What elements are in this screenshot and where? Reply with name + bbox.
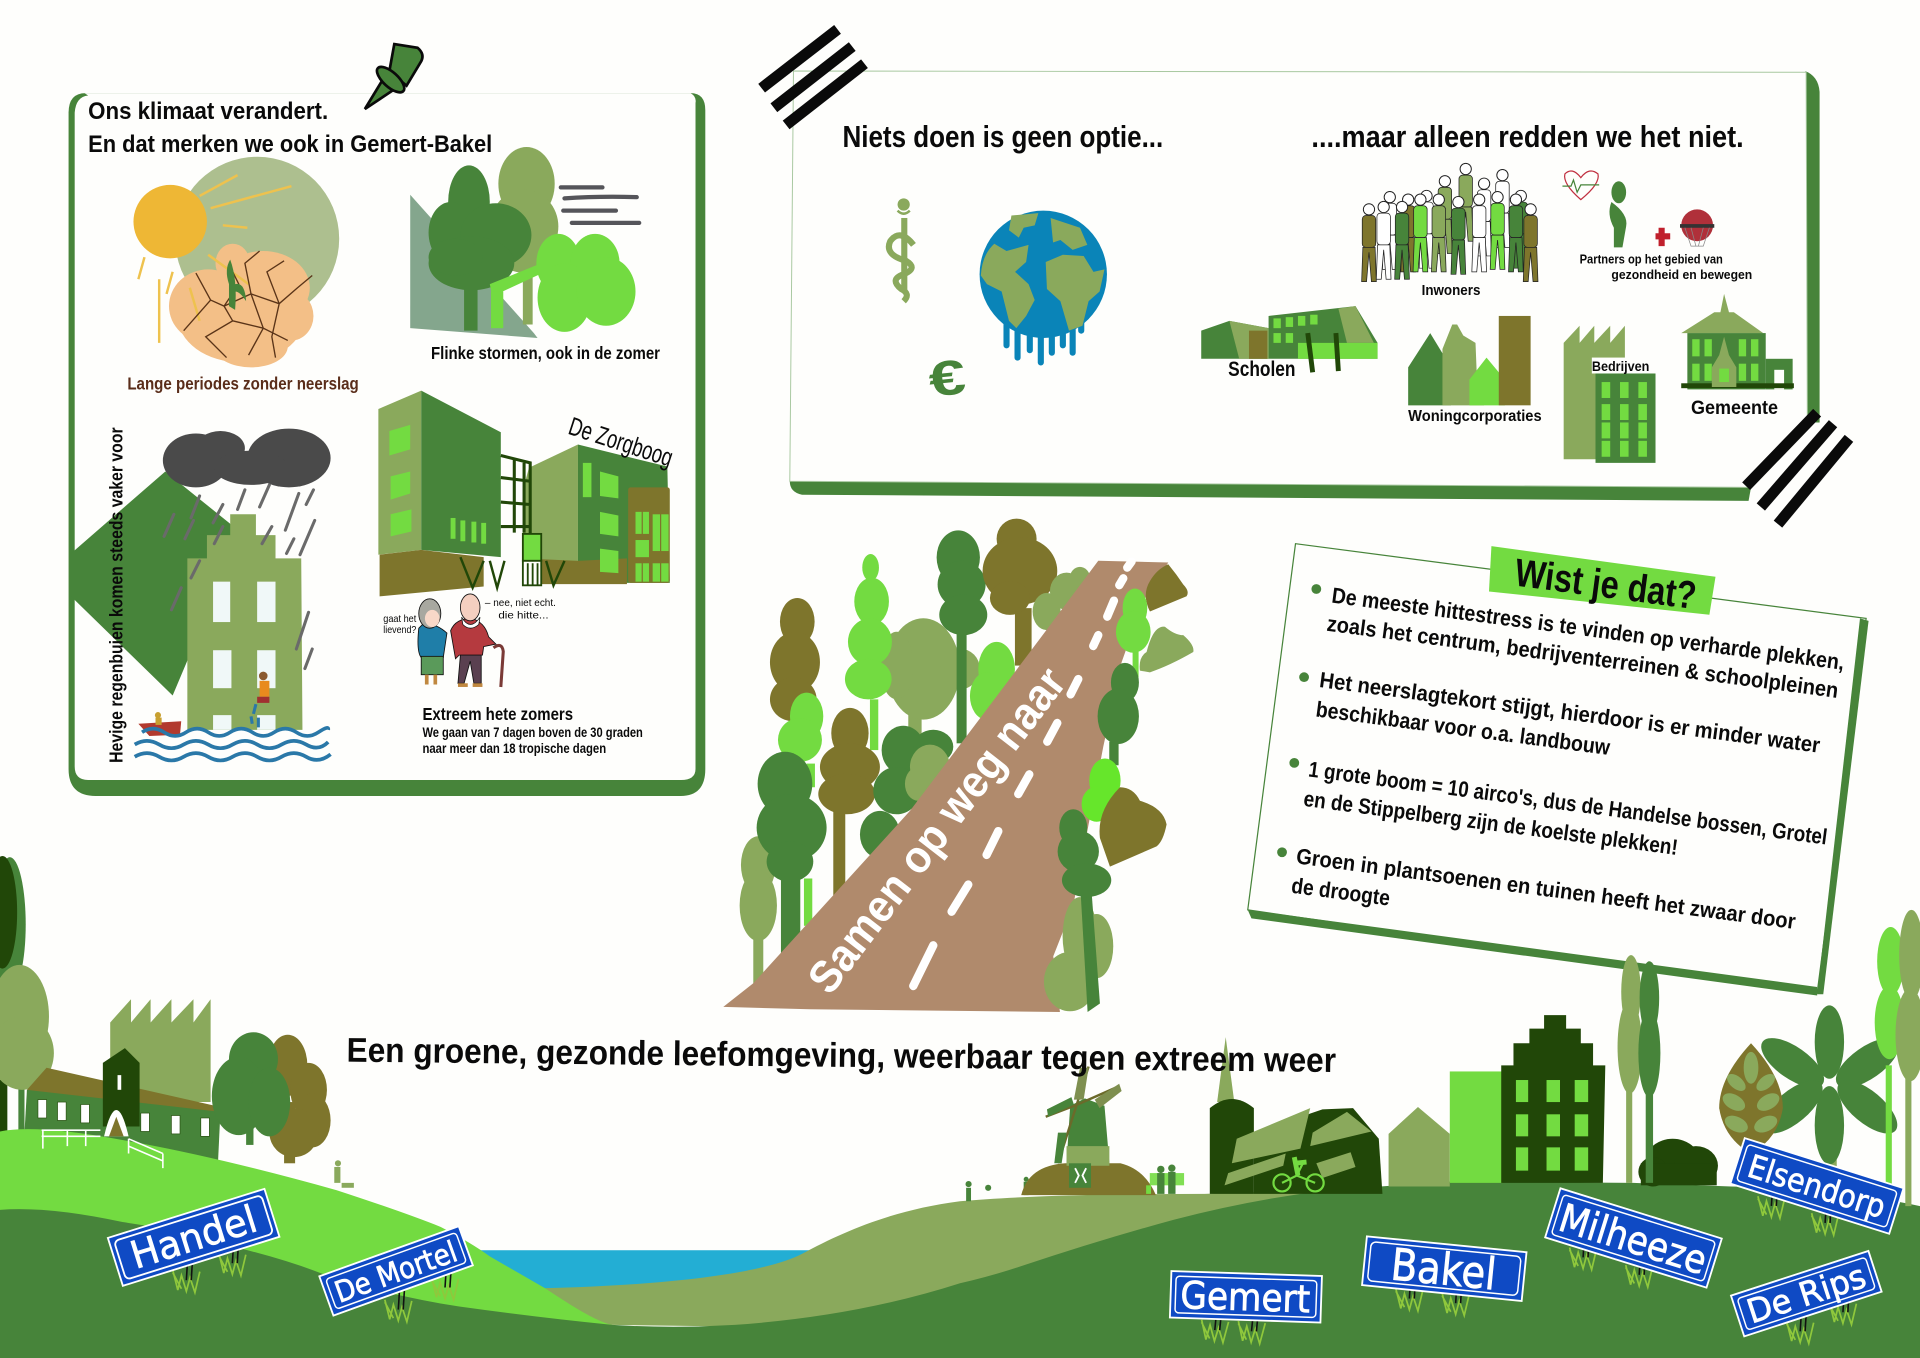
caption: rain vertical: Hevige regenbuien komen steeds vaker voor: [105, 427, 126, 763]
illustration: town hall: [1681, 294, 1794, 389]
caption: storm: Flinke stormen, ook in de zomer: [431, 343, 660, 363]
heading: [88, 98, 492, 158]
illustration: De Zorgboog care building: [378, 391, 670, 596]
illustration: drought: [133, 157, 339, 367]
label: partners: Partners op het gebied van: [1580, 251, 1723, 266]
caption: drought: Lange periodes zonder neerslag: [127, 373, 359, 393]
road title: Samen op weg naar: [798, 657, 1076, 1003]
bullet list: Het neerslagtekort stijgt, hierdoor is er minder water: [1318, 667, 1822, 758]
bullet list: en de Stippelberg zijn de koelste plekken!: [1302, 786, 1679, 860]
mid green hill: [545, 1187, 1389, 1335]
label: inwoners: Inwoners: [1422, 283, 1480, 299]
sign: De Mortel: De Mortel: [330, 1234, 462, 1310]
headings: Niets doen is geen optie...: [842, 120, 1163, 154]
sign: Milheeze: [1538, 1188, 1722, 1310]
sign: Milheeze: Milheeze: [1554, 1196, 1712, 1284]
speech text: [383, 598, 556, 636]
label: partners: gezondheid en bewegen: [1611, 267, 1752, 282]
speech text: – nee, niet echt.: [485, 598, 556, 609]
cyclist: [1273, 1157, 1324, 1191]
sign: Handel: [108, 1189, 288, 1314]
illustration: flooded house in rain: [71, 429, 331, 760]
left edge trees: [0, 856, 54, 1133]
person in window: [251, 672, 269, 727]
bullet list: de droogte: [1290, 873, 1392, 911]
sign: Gemert: [1169, 1271, 1322, 1346]
speech text: lievend?: [383, 625, 417, 636]
sign: De Rips: De Rips: [1742, 1256, 1871, 1331]
road surface: [723, 561, 1168, 1012]
dark green ground: [0, 1182, 1920, 1358]
factory silhouette: [110, 999, 211, 1102]
sign: Gemert: Gemert: [1180, 1273, 1311, 1321]
landscape background: [0, 856, 1920, 1358]
speech text: die hitte...: [498, 610, 549, 621]
caption: hot summers: Extreem hete zomers: [422, 704, 573, 724]
bullet list: beschikbaar voor o.a. landbouw: [1314, 697, 1612, 760]
sign: Elsendorp: Elsendorp: [1743, 1147, 1890, 1226]
headings: ....maar alleen redden we het niet.: [1311, 120, 1744, 154]
bullet list: 1 grote boom = 10 airco's, dus de Handelse bossen, Grotel: [1307, 757, 1829, 850]
caption: hot summers: [422, 704, 643, 756]
illustration: health partners: [1562, 171, 1714, 247]
panel: klimaat verandert: [69, 44, 705, 796]
boat: [138, 712, 181, 736]
sign: Handel: Handel: [125, 1197, 262, 1278]
gabled house: [1389, 1107, 1450, 1187]
tagline: Een groene, gezonde leefomgeving, weerbaar tegen extreem weer: [346, 1032, 1336, 1080]
sign: De Rips: [1731, 1251, 1890, 1358]
bench with people: [1146, 1165, 1184, 1194]
illustration: residents group: [1362, 163, 1538, 282]
sign: Bakel: Bakel: [1389, 1239, 1498, 1301]
label: woningcorporaties: Woningcorporaties: [1408, 408, 1542, 425]
label: gemeente: Gemeente: [1691, 397, 1778, 419]
man: [451, 594, 503, 687]
caption: hot summers: naar meer dan 18 tropische dagen: [422, 741, 606, 756]
heading: Ons klimaat verandert.: [88, 98, 328, 125]
water: [480, 1250, 811, 1299]
label: scholen: Scholen: [1228, 358, 1296, 381]
two trees by the farm: [212, 1032, 331, 1163]
heading: En dat merken we ook in Gemert-Bakel: [88, 131, 492, 158]
illustration: elderly couple: [383, 594, 556, 687]
label: bedrijven: Bedrijven: [1592, 359, 1649, 374]
header badge: Wist je dat?: [1512, 552, 1699, 618]
icon: euro: €: [926, 350, 968, 408]
icon: melting globe: [980, 211, 1107, 362]
woman: [418, 599, 447, 685]
children and ball: [966, 1177, 1029, 1201]
illustration: school: [1201, 306, 1378, 372]
illustration: businesses: [1564, 326, 1656, 463]
caption: hot summers: We gaan van 7 dagen boven de 30 graden: [422, 725, 643, 740]
panel: niets doen: [762, 29, 1849, 524]
church with cyclist: [1210, 1037, 1382, 1194]
castle farm: [24, 1048, 220, 1163]
walker with dog: [334, 1160, 354, 1188]
label: De Zorgboog: De Zorgboog: [565, 413, 676, 472]
dark bush: [1638, 1139, 1718, 1187]
tape bottom right: [1746, 413, 1849, 524]
bullet list: De meeste hittestress is te vinden op verharde plekken,: [1330, 583, 1846, 675]
icon: push pin: [365, 44, 422, 109]
illustration: storm: [410, 147, 639, 338]
bullet list: [1277, 583, 1846, 934]
bullet list: zoals het centrum, bedrijventerreinen & schoolpleinen: [1325, 611, 1840, 703]
speech text: gaat het: [383, 614, 417, 625]
sign: Elsendorp: [1723, 1138, 1904, 1257]
windmill: [1021, 1067, 1156, 1195]
sign: De Mortel: [319, 1226, 484, 1346]
trees behind road: [740, 519, 1090, 987]
tape top left: [762, 29, 864, 125]
farm fences: [42, 1130, 163, 1168]
flower and leaf plants: [1719, 1005, 1907, 1169]
sign: Bakel: [1360, 1236, 1527, 1323]
light green block: [1450, 1071, 1502, 1183]
illustration: housing: [1408, 316, 1531, 405]
label: partners: [1580, 251, 1752, 282]
dark stepped building: [1501, 1015, 1605, 1183]
right edge trees: [1875, 910, 1920, 1206]
bullet list: Groen in plantsoenen en tuinen heeft het zwaar door: [1295, 843, 1797, 934]
panel: wist je dat: [1248, 544, 1869, 996]
icon: staff of Asclepius: [889, 198, 913, 301]
illustration: road with trees: [723, 519, 1193, 1012]
light green hill: [0, 1129, 612, 1358]
poplar trees: [1618, 955, 1660, 1183]
road dashes: [913, 561, 1132, 986]
trees in front of road: [1044, 564, 1193, 1012]
headings: [842, 120, 1744, 154]
